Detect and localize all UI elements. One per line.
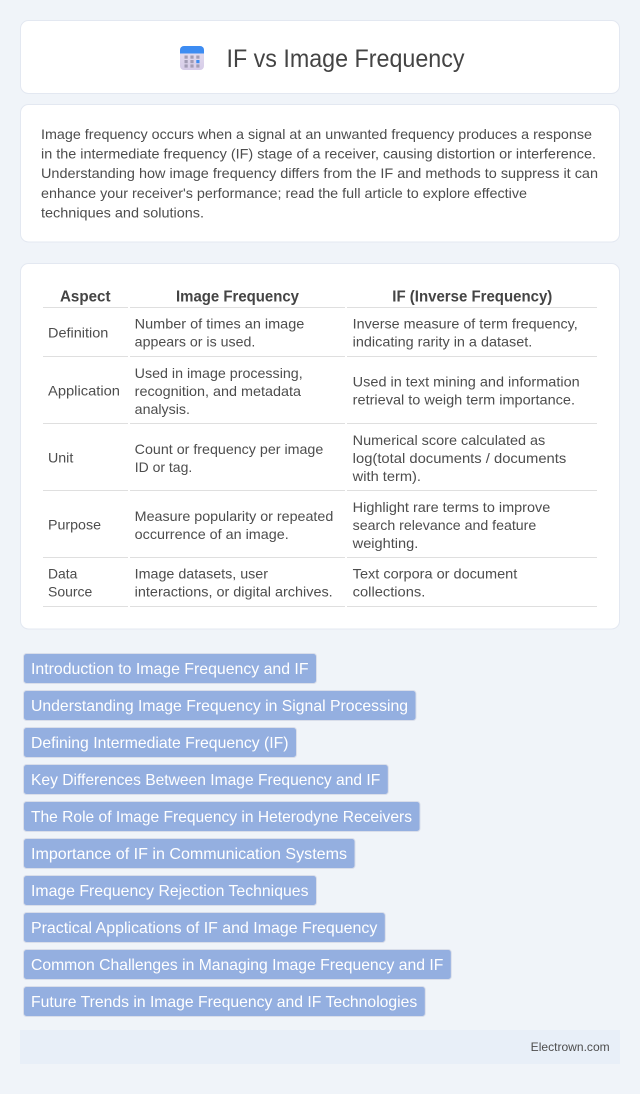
intro text	[41, 126, 598, 220]
intro panel	[20, 104, 620, 242]
table header: IF (Inverse Frequency)	[392, 289, 552, 306]
topic button 5: The Role of Image Frequency in Heterodyne Receivers	[31, 809, 412, 826]
row: application: analysis.	[135, 401, 190, 417]
row: unit: with term).	[352, 468, 421, 484]
row: unit: ID or tag.	[135, 459, 192, 475]
row: unit: log(total documents / documents	[353, 450, 566, 466]
row: purpose: Highlight rare terms to improve	[353, 499, 551, 515]
footer	[20, 1030, 620, 1064]
row: application	[43, 365, 597, 424]
row: unit	[43, 432, 597, 491]
row: application: Used in image processing,	[135, 365, 303, 381]
topic button 4: Key Differences Between Image Frequency and IF	[31, 772, 381, 789]
row: data source: Text corpora or document	[353, 566, 517, 582]
row: purpose: weighting.	[352, 535, 418, 551]
topic button 10	[24, 986, 425, 1016]
topic button 2: Understanding Image Frequency in Signal Processing	[31, 698, 408, 715]
table panel	[20, 264, 620, 629]
header panel	[20, 20, 620, 94]
table header: Image Frequency	[176, 289, 299, 306]
topic button 6	[24, 838, 355, 868]
row: definition: Number of times an image	[135, 316, 305, 332]
row: unit: Numerical score calculated as	[353, 432, 545, 448]
row: data source: interactions, or digital archives.	[135, 584, 333, 600]
row: application: retrieval to weigh term importance.	[353, 392, 575, 408]
topic button 8	[24, 912, 385, 942]
row: unit: Count or frequency per image	[135, 441, 324, 457]
intro text: Image frequency occurs when a signal at an unwanted frequency produces a response	[41, 126, 592, 142]
topic button 1	[24, 654, 316, 684]
row: application: recognition, and metadata	[135, 383, 301, 399]
topic button 10: Future Trends in Image Frequency and IF Technologies	[31, 994, 417, 1011]
row: data source	[43, 566, 597, 607]
row: definition: Inverse measure of term frequency,	[353, 316, 578, 332]
footer: Electrown.com	[531, 1040, 610, 1054]
topic button 1: Introduction to Image Frequency and IF	[31, 661, 309, 678]
row: data source: Image datasets, user	[135, 566, 268, 582]
icon: calendar	[180, 46, 204, 70]
row: application: Application	[48, 383, 120, 399]
topic button 9	[24, 950, 451, 980]
topic list	[24, 654, 451, 1016]
table header: Aspect	[60, 289, 111, 306]
row: application: Used in text mining and information	[353, 374, 580, 390]
topic button 6: Importance of IF in Communication Systems	[31, 846, 347, 863]
intro text: techniques and solutions.	[41, 204, 204, 220]
topic button 3: Defining Intermediate Frequency (IF)	[31, 735, 288, 752]
row: purpose: Measure popularity or repeated	[135, 508, 333, 524]
row: purpose: Purpose	[48, 517, 101, 533]
topic button 4	[24, 764, 388, 794]
topic button 8: Practical Applications of IF and Image Frequency	[31, 920, 377, 937]
topic button 5	[24, 802, 420, 832]
topic button 7: Image Frequency Rejection Techniques	[31, 883, 308, 900]
row: definition: indicating rarity in a dataset.	[353, 334, 532, 350]
title: IF vs Image Frequency	[226, 45, 465, 73]
row: data source: Source	[48, 584, 93, 600]
row: purpose: search relevance and feature	[353, 517, 537, 533]
intro text: enhance your receiver's performance; read the full article to explore effective	[41, 185, 527, 201]
row: purpose: occurrence of an image.	[135, 526, 289, 542]
intro text: Understanding how image frequency differs from the IF and methods to suppress it can	[41, 165, 598, 181]
row: unit: Unit	[48, 450, 73, 466]
topic button 2	[24, 690, 416, 720]
topic button 7	[24, 876, 316, 906]
row: definition	[43, 316, 597, 357]
row: definition: Definition	[48, 325, 108, 341]
row: definition: appears or is used.	[135, 334, 255, 350]
row: data source: Data	[48, 566, 78, 582]
row: purpose	[43, 499, 597, 558]
topic button 3	[24, 728, 296, 758]
topic button 9: Common Challenges in Managing Image Frequency and IF	[31, 957, 444, 974]
row: data source: collections.	[353, 584, 425, 600]
table header	[43, 289, 597, 308]
intro text: in the intermediate frequency (IF) stage of a receiver, causing distortion or interference.	[41, 146, 596, 162]
